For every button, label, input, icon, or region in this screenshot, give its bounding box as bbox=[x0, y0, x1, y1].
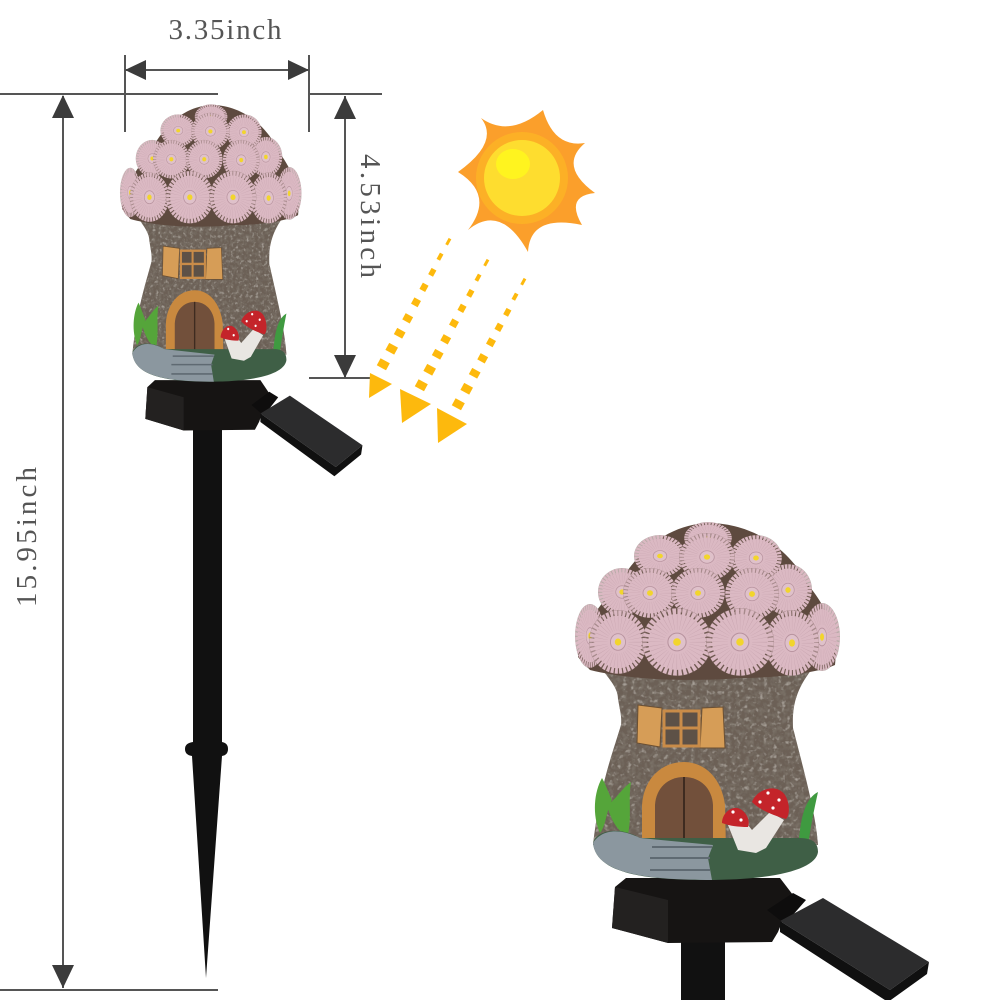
large product: mushroom house bbox=[575, 522, 840, 880]
ray 2 bbox=[419, 260, 488, 389]
small product: solar base bbox=[145, 380, 362, 476]
dimension arrows bbox=[52, 60, 356, 988]
large product: solar base bbox=[612, 878, 929, 1000]
ray 3 bbox=[456, 279, 525, 408]
arrowhead 1 bbox=[369, 373, 392, 398]
label: house height: 4.53inch bbox=[354, 154, 386, 278]
label: total height: 15.95inch bbox=[11, 466, 43, 607]
arrowhead 3 bbox=[437, 408, 467, 443]
sun rays bbox=[369, 239, 525, 443]
small product: mushroom house bbox=[120, 104, 302, 382]
ray 1 bbox=[381, 239, 450, 368]
dimension lines bbox=[0, 55, 382, 990]
large product: stake bbox=[681, 935, 725, 1000]
small product: stake bbox=[185, 425, 228, 978]
arrowhead 2 bbox=[400, 389, 431, 423]
icon: sun bbox=[458, 110, 595, 252]
label: width: 3.35inch bbox=[168, 14, 282, 46]
